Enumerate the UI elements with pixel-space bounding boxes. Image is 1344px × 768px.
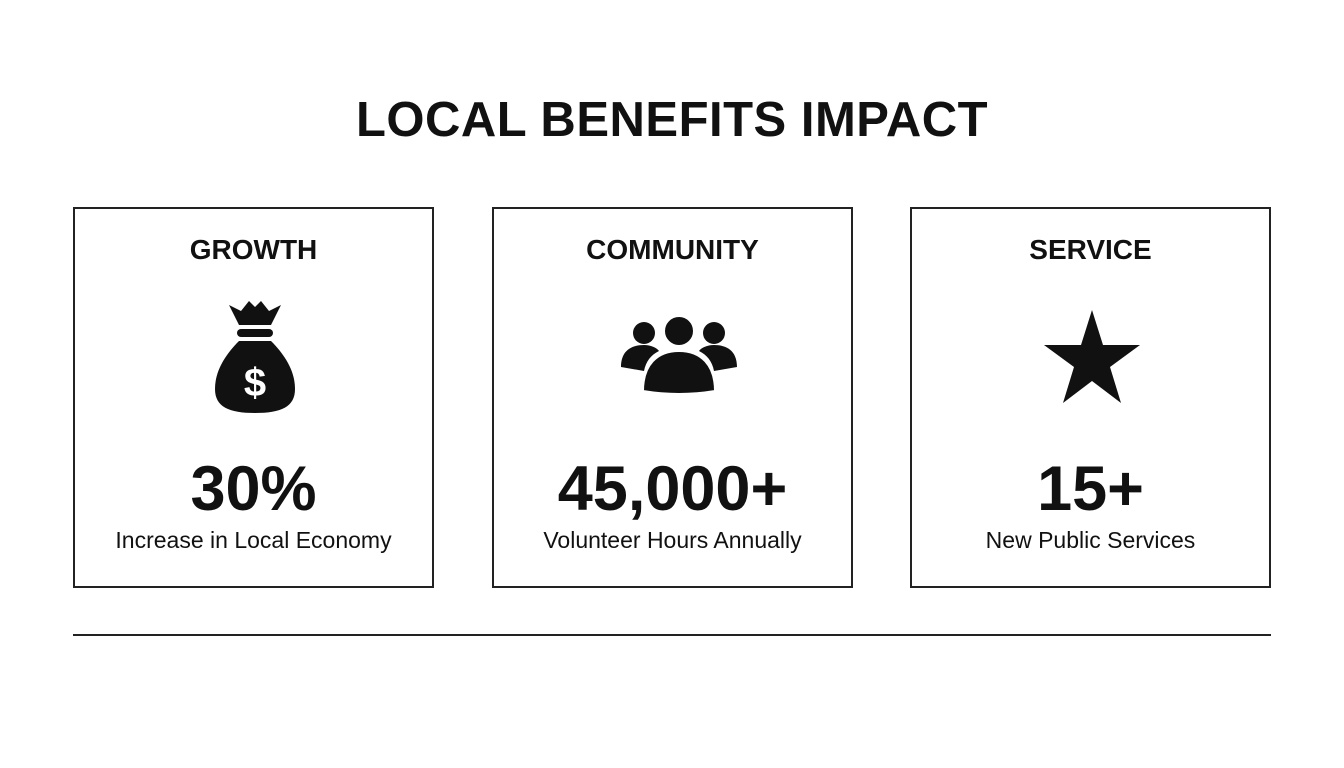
icon: star (1044, 310, 1140, 403)
icon: money bag (215, 301, 295, 413)
number: 15+ (1037, 454, 1144, 524)
heading: service: SERVICE (1029, 234, 1152, 265)
caption: Increase in Local Economy (115, 527, 392, 553)
number: 30% (190, 454, 317, 524)
caption: New Public Services (986, 527, 1195, 553)
icon: people (621, 317, 737, 393)
panel: service (910, 207, 1271, 588)
heading: growth: GROWTH (190, 234, 317, 265)
panel: growth (73, 207, 434, 588)
caption: Volunteer Hours Annually (543, 527, 802, 553)
title: LOCAL BENEFITS IMPACT (356, 93, 988, 147)
icon: money bag: $ (244, 361, 266, 405)
panel: community (492, 207, 853, 588)
heading: community: COMMUNITY (586, 234, 759, 265)
number: 45,000+ (558, 454, 787, 524)
